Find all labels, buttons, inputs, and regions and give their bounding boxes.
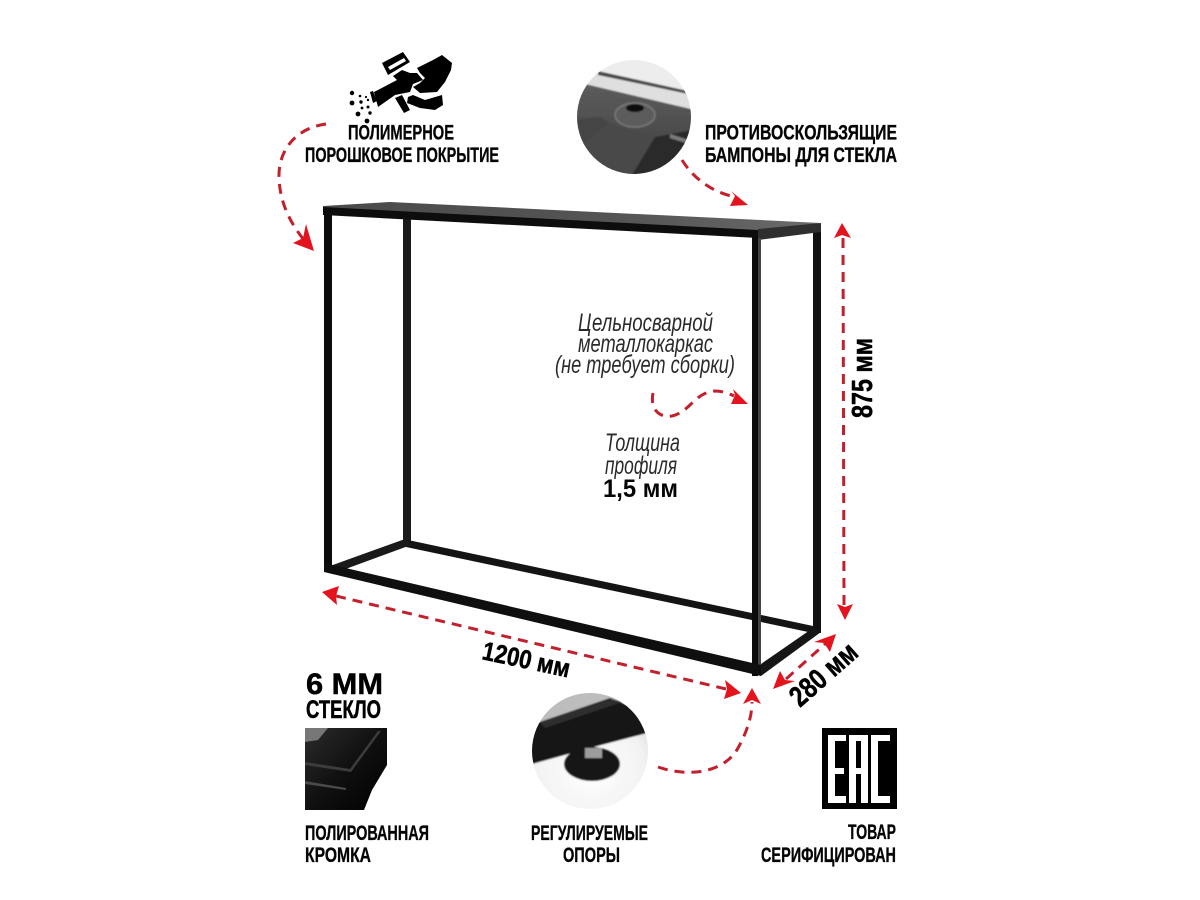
back left leg bbox=[403, 214, 411, 544]
icon: EAC mark bbox=[822, 728, 897, 809]
caption: adjustable feet bbox=[531, 821, 648, 867]
arrow: height dimension bbox=[834, 223, 853, 620]
right front leg bbox=[752, 232, 758, 676]
text: welded frame: (не требует сборки) bbox=[555, 351, 735, 379]
photo: glass edge bbox=[305, 728, 387, 810]
heading: bumpers: БАМПОНЫ ДЛЯ СТЕКЛА bbox=[705, 143, 897, 167]
arrow: powder coating to frame bbox=[279, 124, 326, 251]
arrow: depth dimension bbox=[773, 634, 836, 689]
dimension: 1200 mm: 1200 мм bbox=[480, 636, 573, 683]
heading: bumpers bbox=[705, 120, 897, 167]
right front leg highlight bbox=[758, 238, 761, 674]
arrow: foot to leg bbox=[658, 688, 761, 772]
heading: powder coating bbox=[305, 120, 499, 167]
caption: certified: ТОВАР bbox=[848, 820, 896, 844]
dimension: 875 mm: 875 мм bbox=[847, 338, 879, 418]
arrow: bumpers to glass bbox=[682, 160, 748, 206]
right back leg bbox=[813, 230, 821, 633]
text: welded frame: металлокаркас bbox=[578, 330, 713, 358]
caption: certified: СЕРИФИЦИРОВАН bbox=[761, 843, 896, 867]
text: profile thickness: Толщина bbox=[605, 429, 680, 457]
heading: powder coating: ПОЛИМЕРНОЕ bbox=[348, 120, 454, 144]
text: profile thickness: профиля bbox=[605, 452, 677, 480]
left front leg bbox=[324, 208, 332, 572]
heading: powder coating: ПОРОШКОВОЕ ПОКРЫТИЕ bbox=[305, 143, 499, 167]
text: profile thickness: 1,5 мм bbox=[603, 475, 678, 503]
text: welded frame bbox=[555, 309, 735, 379]
heading: bumpers: ПРОТИВОСКОЛЬЗЯЩИЕ bbox=[705, 120, 897, 144]
right bottom side rail bbox=[761, 628, 821, 676]
caption: certified bbox=[761, 820, 896, 867]
top side band bbox=[758, 223, 821, 240]
caption: adjustable feet: РЕГУЛИРУЕМЫЕ bbox=[531, 821, 648, 845]
left bottom side rail bbox=[330, 539, 411, 574]
caption: adjustable feet: ОПОРЫ bbox=[563, 843, 620, 867]
dimension: 280 mm: 280 мм bbox=[783, 636, 865, 713]
heading: 6 mm glass: 6 ММ bbox=[306, 668, 383, 701]
text: profile thickness bbox=[603, 429, 680, 503]
front bottom rail bbox=[324, 563, 761, 676]
top front band bbox=[323, 207, 758, 238]
caption: polished edge: КРОМКА bbox=[305, 843, 371, 867]
metal console frame bbox=[323, 202, 821, 676]
caption: polished edge bbox=[305, 821, 429, 867]
icon: spray gun bbox=[350, 52, 452, 123]
heading: 6 mm glass: СТЕКЛО bbox=[306, 696, 381, 724]
caption: polished edge: ПОЛИРОВАННАЯ bbox=[305, 821, 429, 845]
photo: adjustable foot bbox=[532, 693, 648, 809]
back bottom rail bbox=[406, 540, 813, 633]
heading: 6 mm glass bbox=[306, 668, 383, 724]
photo: glass bumper bbox=[577, 60, 691, 174]
glass top surface bbox=[323, 202, 821, 232]
arrow: width dimension bbox=[322, 586, 741, 699]
arrow: welded frame to leg bbox=[652, 389, 748, 416]
text: welded frame: Цельносварной bbox=[578, 309, 713, 337]
